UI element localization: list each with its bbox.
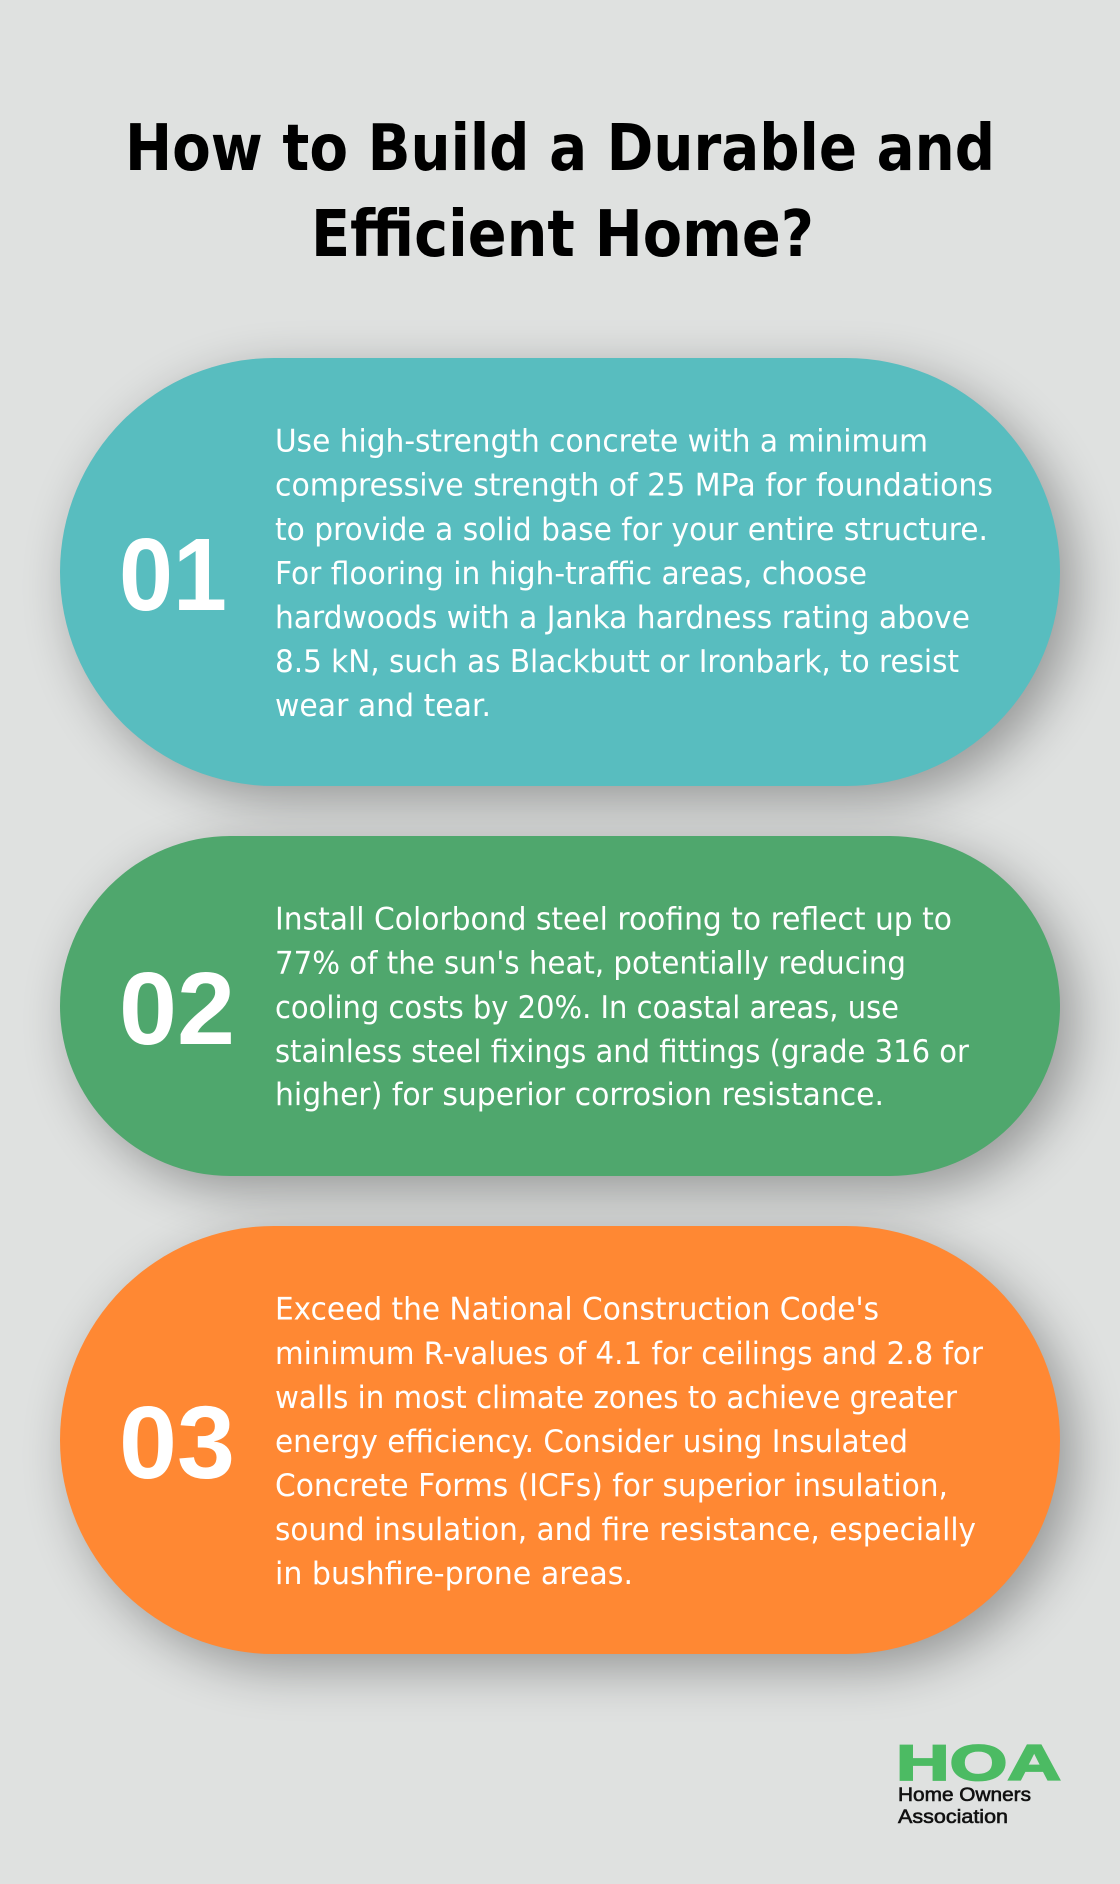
title: Efficient Home? (311, 197, 814, 272)
text block: step 02: Install Colorbond steel roofing to reflect up to (275, 902, 952, 938)
panel: step 03 (60, 1226, 1060, 1654)
text block: step 03: Exceed the National Construction Code's (275, 1292, 879, 1328)
text block: step 03: Concrete Forms (ICFs) for superior insulation, (275, 1468, 948, 1504)
panel: step 01 (60, 358, 1060, 786)
logo: Home Owners Association: Association (898, 1806, 1008, 1828)
text block: step 01: For flooring in high-traffic areas, choose (275, 556, 867, 592)
title (125, 111, 995, 272)
text block: step 01: hardwoods with a Janka hardness rating above (275, 600, 970, 636)
text block: step 02: 77% of the sun's heat, potentially reducing (275, 946, 906, 982)
text block: step 01: wear and tear. (275, 688, 491, 724)
text block: step 02: cooling costs by 20%. In coastal areas, use (275, 990, 899, 1026)
step number 01: 01 (119, 517, 227, 632)
text block: step 03: energy efficiency. Consider using Insulated (275, 1424, 908, 1460)
text block: step 01: compressive strength of 25 MPa for foundations (275, 468, 993, 504)
text block: step 03: minimum R-values of 4.1 for ceilings and 2.8 for (275, 1336, 983, 1372)
text block: step 01: to provide a solid base for your entire structure. (275, 512, 988, 548)
text block: step 02 (275, 902, 969, 1113)
step number 03: 03 (119, 1385, 235, 1500)
step number 02: 02 (119, 951, 235, 1066)
logo: Home Owners Association: Home Owners (898, 1784, 1031, 1806)
text block: step 01: Use high-strength concrete with a minimum (275, 424, 928, 460)
text block: step 03: in bushfire-prone areas. (275, 1556, 633, 1592)
logo: Home Owners Association (896, 1736, 1061, 1828)
text block: step 03: walls in most climate zones to achieve greater (275, 1380, 957, 1416)
text block: step 02: higher) for superior corrosion resistance. (275, 1077, 884, 1113)
text block: step 02: stainless steel fixings and fittings (grade 316 or (275, 1034, 969, 1070)
text block: step 01 (275, 424, 993, 724)
text block: step 03: sound insulation, and fire resistance, especially (275, 1512, 976, 1548)
text block: step 01: 8.5 kN, such as Blackbutt or Ironbark, to resist (275, 644, 959, 680)
logo: Home Owners Association: HOA (896, 1736, 1061, 1791)
panel: step 02 (60, 836, 1060, 1176)
text block: step 03 (275, 1292, 983, 1592)
